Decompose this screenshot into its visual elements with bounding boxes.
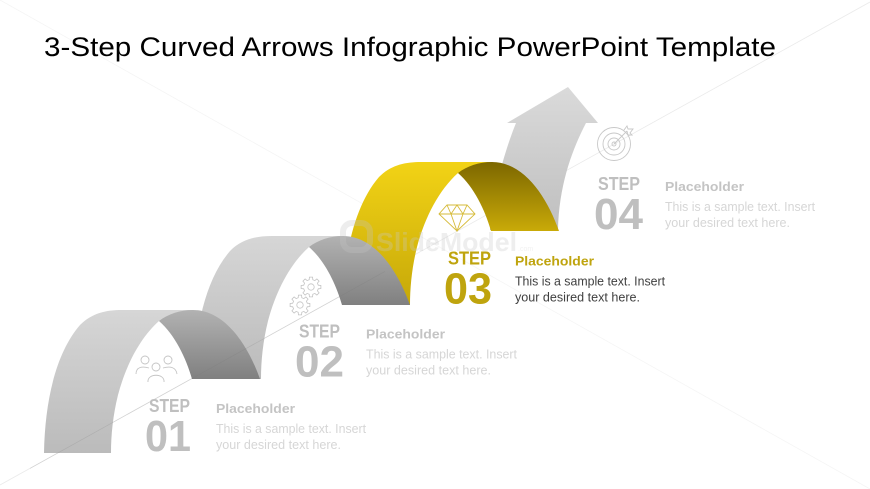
text: step 2: This is a sample text. Insert bbox=[366, 348, 518, 362]
text: step 4: STEP bbox=[598, 174, 640, 194]
text: step 2: STEP bbox=[299, 322, 340, 342]
curved arrow: step 1 bbox=[44, 310, 260, 453]
title: 3-Step Curved Arrows Infographic PowerPoint Template bbox=[44, 32, 776, 62]
watermark bbox=[343, 223, 533, 257]
text: step 2: 02 bbox=[295, 338, 344, 386]
text: step 2: Placeholder bbox=[366, 326, 445, 342]
icon: gears bbox=[290, 277, 321, 315]
text: step 4: your desired text here. bbox=[665, 216, 790, 230]
text: step 4 bbox=[594, 174, 816, 239]
text: step 1: STEP bbox=[149, 396, 190, 416]
text: step 3 bbox=[444, 248, 666, 314]
text: step 4: Placeholder bbox=[665, 179, 744, 194]
text: step 3: STEP bbox=[448, 248, 491, 268]
text: step 1: This is a sample text. Insert bbox=[216, 422, 367, 436]
watermark: SlideModel bbox=[376, 227, 517, 257]
icon: team bbox=[136, 356, 177, 382]
curved arrow: step 2 bbox=[194, 236, 410, 379]
arrow: final upward arrow bbox=[490, 87, 598, 230]
text: step 4: 04 bbox=[594, 190, 644, 239]
curved arrow: step 3 (yellow) bbox=[343, 162, 559, 305]
icon: diamond bbox=[439, 205, 475, 231]
icon: target bbox=[598, 126, 633, 160]
text: step 1: your desired text here. bbox=[216, 438, 341, 452]
text: step 2: your desired text here. bbox=[366, 364, 491, 378]
text: step 1: Placeholder bbox=[216, 401, 295, 416]
text: step 3: Placeholder bbox=[515, 254, 594, 268]
text: step 2 bbox=[295, 322, 518, 386]
text: step 3: This is a sample text. Insert bbox=[515, 274, 666, 288]
text: step 1 bbox=[145, 396, 367, 461]
text: step 3: your desired text here. bbox=[515, 290, 640, 304]
text: step 1: 01 bbox=[145, 412, 191, 461]
text: step 3: 03 bbox=[444, 264, 492, 314]
text: step 4: This is a sample text. Insert bbox=[665, 200, 816, 214]
watermark: .com bbox=[518, 246, 533, 253]
